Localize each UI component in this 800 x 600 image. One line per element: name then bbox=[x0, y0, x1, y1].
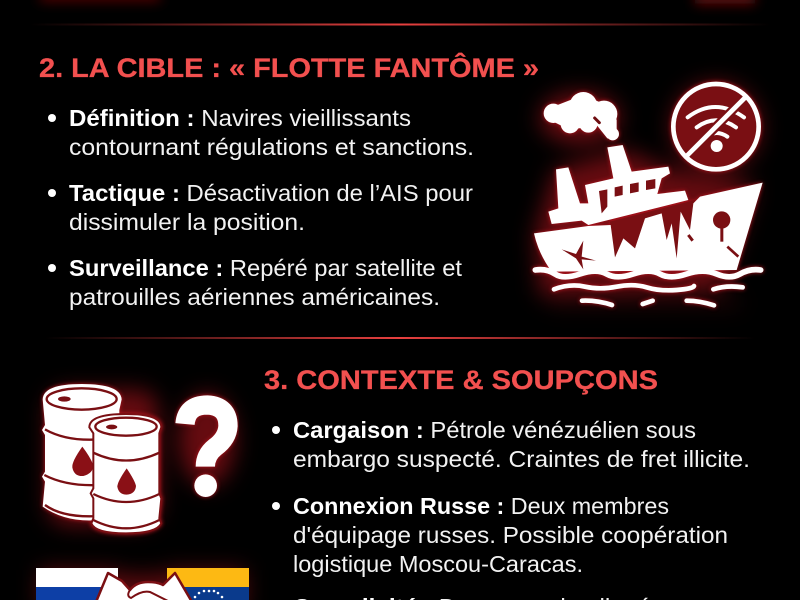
red haze behind icons bbox=[40, 83, 760, 600]
icon: no-wifi sign bbox=[673, 84, 759, 169]
icon: oil barrels bbox=[42, 384, 161, 533]
heading: section 2: 2. LA CIBLE : « FLOTTE FANTÔME » bbox=[39, 52, 539, 83]
bullet list: section 3: Connexion Russe : Deux membres bbox=[293, 493, 669, 519]
icon: front barrel bbox=[89, 414, 161, 533]
icon: Venezuelan flag bbox=[167, 568, 249, 600]
bullet list: section 3: d'équipage russes. Possible coopération bbox=[293, 522, 728, 548]
bullet list: section 3 bbox=[272, 417, 750, 600]
bullet list: section 2: Surveillance : Repéré par satellite et bbox=[69, 255, 463, 281]
bullet list: section 2: Définition : Navires vieillissants bbox=[69, 105, 411, 131]
bullet list: section 2: dissimuler la position. bbox=[69, 209, 305, 235]
icon: back barrel bbox=[42, 384, 122, 521]
icon: handshake bbox=[96, 573, 192, 600]
icon: smoke cloud bbox=[544, 92, 619, 140]
icon: sinking ghost ship with no-wifi sign bbox=[534, 84, 763, 305]
bullet list: section 2 bbox=[48, 105, 474, 310]
bullet list: section 3: embargo suspecté. Craintes de fret illicite. bbox=[293, 446, 750, 472]
icon: ship superstructure bbox=[548, 145, 688, 225]
icon: ship interior backing bbox=[610, 200, 695, 262]
icon: question mark bbox=[185, 405, 228, 497]
bullet list: section 2: Tactique : Désactivation de l’AIS pour bbox=[69, 180, 473, 206]
icon: Russian flag bbox=[36, 568, 118, 600]
bullet list: section 3: logistique Moscou-Caracas. bbox=[293, 551, 583, 577]
bullet list: section 2: patrouilles aériennes américaines. bbox=[69, 284, 440, 310]
top glow remnants of previous section bbox=[40, 0, 755, 4]
icon: broken hull bbox=[534, 183, 763, 272]
icon: Russia and Venezuela flags with handshake bbox=[36, 568, 249, 600]
bullet list: section 3: Cargaison : Pétrole vénézuélien sous bbox=[293, 417, 696, 443]
bullet list: section 2: contournant régulations et sanctions. bbox=[69, 134, 474, 160]
icon: waves bbox=[535, 270, 761, 305]
heading: section 3: 3. CONTEXTE & SOUPÇONS bbox=[264, 365, 658, 395]
